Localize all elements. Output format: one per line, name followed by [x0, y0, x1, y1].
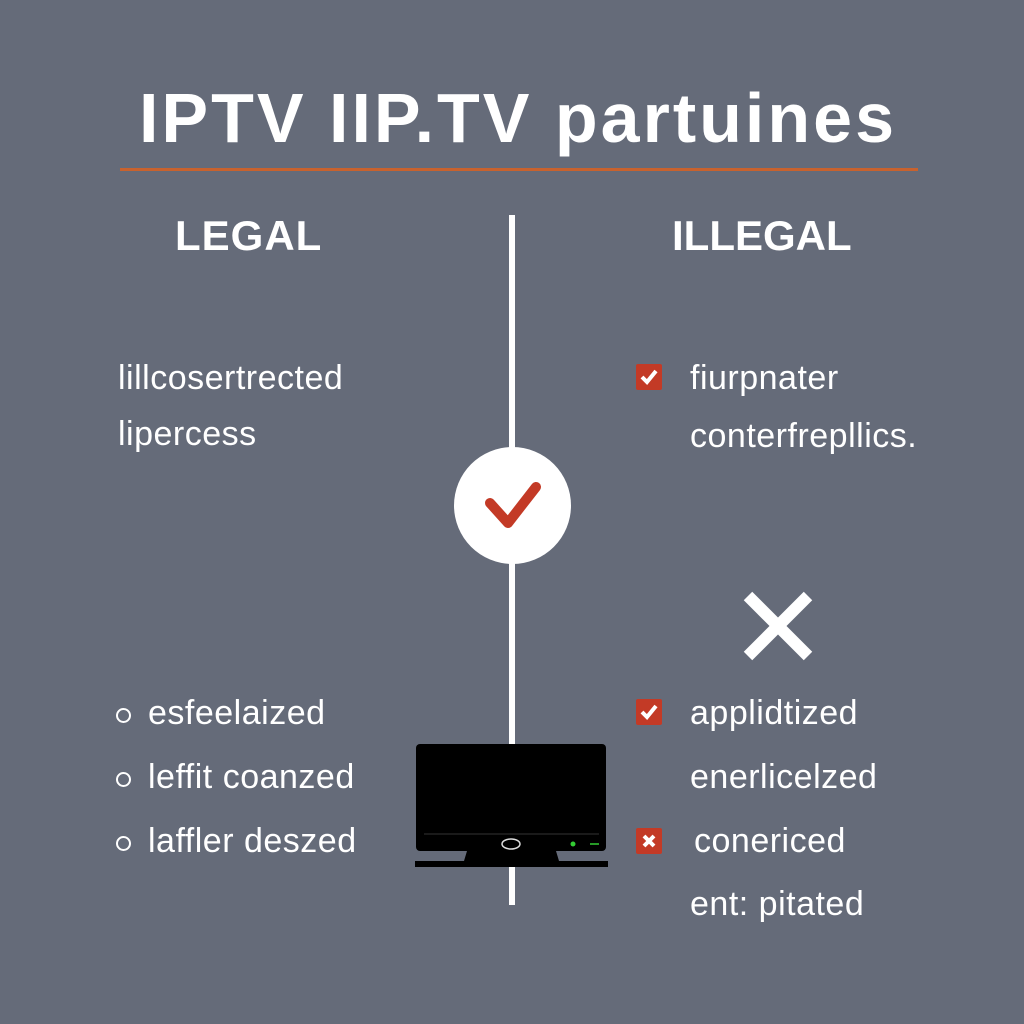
- panel: illegal: enerlicelzed: [690, 758, 877, 796]
- panel: illegal: [636, 359, 917, 923]
- title: IPTV IIP.TV partuines: [139, 79, 897, 157]
- panel: legal: lipercess: [118, 415, 257, 453]
- panel: illegal: conterfrepllics.: [690, 417, 917, 455]
- icon: TV: [415, 744, 608, 867]
- legal list: leffit coanzed: [148, 758, 355, 796]
- title underline: [120, 168, 918, 171]
- panel: illegal: fiurpnater: [690, 359, 839, 397]
- icon: X mark: [744, 592, 812, 660]
- heading: illegal: ILLEGAL: [672, 212, 852, 259]
- legal list: laffler deszed: [148, 822, 357, 860]
- panel: illegal: applidtized: [690, 694, 858, 732]
- heading: legal: LEGAL: [175, 212, 322, 259]
- vertical divider: [509, 215, 515, 905]
- legal list: [116, 694, 357, 860]
- legal text top: lillcosertrected: [118, 359, 343, 397]
- panel: legal: [116, 359, 357, 860]
- legal list: esfeelaized: [148, 694, 326, 732]
- panel: illegal: conericed: [694, 822, 846, 860]
- panel: illegal: ent: pitated: [690, 885, 864, 923]
- icon: check circle: [454, 447, 571, 564]
